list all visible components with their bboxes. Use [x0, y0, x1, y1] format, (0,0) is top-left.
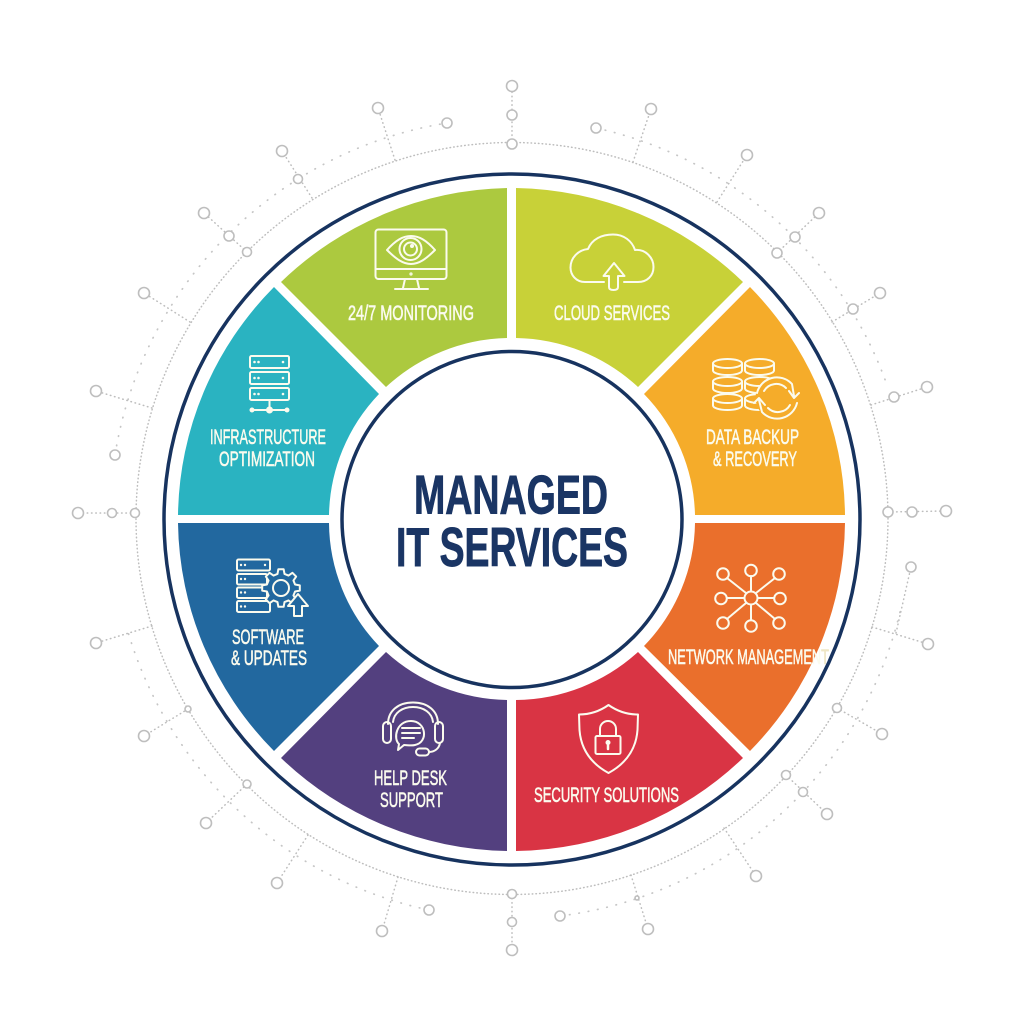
panel: cloud services — [516, 188, 743, 387]
panel: infrastructure optimization — [178, 287, 379, 515]
panel: software and updates — [178, 523, 379, 751]
icon: monitor with eye — [376, 230, 446, 289]
label: NETWORK MANAGEMENT — [668, 646, 829, 669]
label — [706, 426, 799, 471]
label: CLOUD SERVICES — [554, 302, 670, 325]
label: SUPPORT — [380, 789, 443, 812]
title — [396, 464, 628, 578]
label: SECURITY SOLUTIONS — [534, 784, 679, 807]
label: DATA BACKUP — [706, 426, 799, 449]
outer navy ring — [164, 174, 860, 865]
label — [210, 426, 326, 471]
label: 24/7 MONITORING — [348, 302, 474, 325]
icon: cloud upload — [570, 234, 654, 290]
label — [231, 626, 307, 670]
title: MANAGED — [414, 464, 608, 526]
label: OPTIMIZATION — [219, 448, 315, 471]
inner navy circle — [342, 352, 682, 688]
label — [374, 767, 447, 812]
panel: network management — [644, 523, 845, 751]
label: HELP DESK — [374, 767, 447, 790]
label: INFRASTRUCTURE — [210, 426, 326, 449]
icon: servers, gear and up arrow — [237, 560, 308, 616]
icon: shield with padlock — [579, 705, 638, 773]
label: & UPDATES — [231, 647, 307, 670]
title: IT SERVICES — [396, 516, 628, 578]
label: & RECOVERY — [713, 448, 797, 471]
panel: security solutions — [516, 652, 743, 851]
panel: help desk support — [281, 652, 507, 851]
background network of dotted rings and nodes — [72, 80, 952, 956]
panel: data backup and recovery — [644, 287, 845, 515]
network nodes — [72, 80, 952, 956]
panel: 24/7 monitoring — [281, 188, 507, 387]
icon: network hub — [715, 565, 786, 632]
label: SOFTWARE — [232, 626, 304, 649]
icon: headset with speech bubble — [383, 702, 443, 756]
icon: server rack with network line — [250, 356, 289, 412]
icon: database stacks with sync arrows — [713, 359, 799, 420]
